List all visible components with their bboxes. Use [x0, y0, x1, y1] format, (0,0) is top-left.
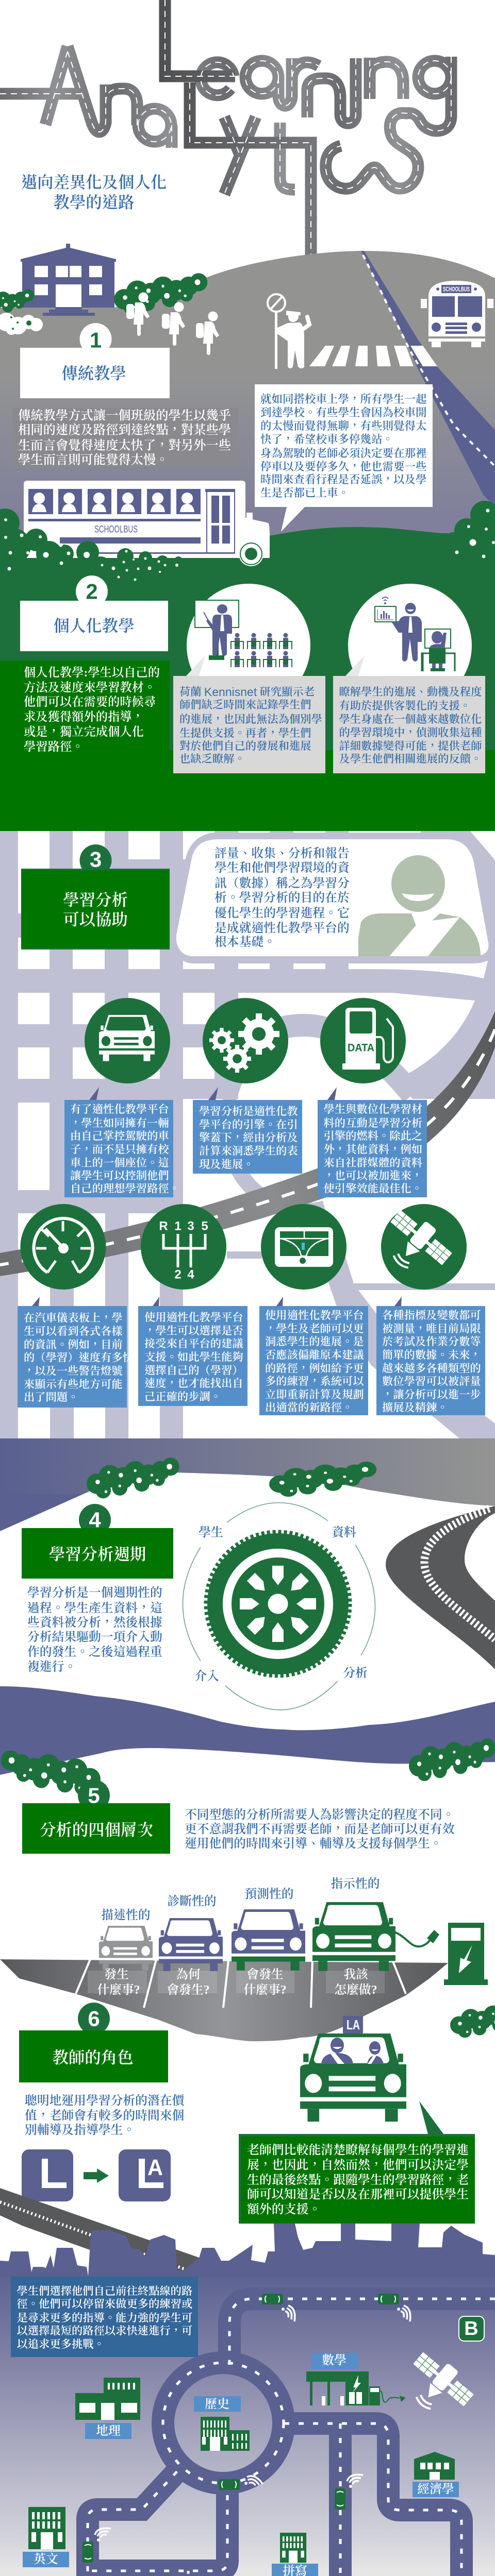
number badge 6	[78, 2003, 110, 2035]
text box: dashboard: 的資訊。例如，目前	[24, 1338, 123, 1351]
section 2 background: bright green	[0, 660, 495, 831]
text box: understanding students: 瞭解學生的進展、動機及程度	[339, 686, 482, 698]
text box: understanding students: 學生身處在一個越來越數位化	[338, 713, 482, 725]
subtitle	[21, 173, 167, 211]
text block: traditional teaching: 生而言會覺得速度太快了，對另外一些	[18, 439, 231, 452]
text block: cycle description	[27, 1586, 162, 1674]
level 3: predictive car: 什麼事?	[243, 1983, 287, 1997]
text block: personalised teaching: 或是，獨立完成個人化	[24, 725, 144, 739]
level 2: diagnostic car: 診斷性的	[167, 1894, 217, 1908]
heading: learning analytics cycle	[22, 1528, 173, 1579]
text box: navigation: 多的練習，系統可以	[265, 1375, 365, 1387]
icon: school bus side: SCHOOLBUS	[94, 524, 138, 535]
section 3 background: street grid	[0, 831, 495, 1438]
text block: levels of analytics: 更不意謂我們不再需要老師，而是老師可以更有效	[185, 1822, 455, 1836]
text box: adaptive platform car: 由自己掌控駕駛的車	[70, 1130, 169, 1142]
curved dark road	[386, 1506, 495, 1669]
heading: four levels of analytics: 分析的四個層次	[40, 1821, 153, 1839]
chart: tyre cycle diagram	[183, 1503, 375, 1710]
text block: traditional teaching: 傳統教學方式讓一個班級的學生以幾乎	[18, 409, 231, 422]
bush right of section 6	[450, 2003, 495, 2038]
number badge 4: 4	[89, 1507, 101, 1532]
heading: four levels of analytics	[22, 1803, 170, 1854]
text box: dashboard: 來顯示有些地方可能	[24, 1378, 123, 1391]
chart: tyre cycle diagram: 介入	[194, 1669, 219, 1683]
level 4: prescriptive car and charger	[312, 1877, 488, 1997]
text block: cycle description: 分析結果驅動一項介入動	[27, 1630, 162, 1644]
level 1: descriptive car: 描述性的	[101, 1908, 151, 1922]
callout: school bus analogy: 的太慢而覺得無聊，有些則覺得太	[260, 420, 427, 432]
text box: fuel: 學生與數位化學習材	[323, 1103, 422, 1115]
icon: learner car with LA sign	[300, 2016, 406, 2122]
windshield with definition and driver: 學生和他們學習環境的資	[214, 861, 351, 875]
text box: dashboard: ，以及一些警告燈號	[24, 1365, 123, 1377]
text box: Kennisnet research	[173, 676, 325, 773]
icon: school building	[21, 244, 116, 316]
bushes around the green hill	[0, 501, 495, 581]
text box: navigation	[259, 1306, 368, 1415]
illustration: teacher with tablet bubble	[345, 584, 472, 707]
building: history	[194, 2396, 250, 2451]
signs A and B: B	[464, 2318, 478, 2340]
bushes section 5	[1, 1738, 495, 1795]
text box: gears choice: ，學生可以選擇是否	[144, 1325, 243, 1337]
text box: indicators: 越來越多各種類型的	[382, 1362, 481, 1375]
text box: dashboard: 的（學習）速度有多快	[24, 1351, 134, 1364]
text box: gears choice: 接受來自平台的建議	[144, 1337, 243, 1350]
icon: car	[85, 998, 170, 1100]
section 6 map background	[0, 2276, 495, 2576]
icon: data fuel pump: DATA	[348, 1042, 374, 1054]
building: mathematics charging station	[306, 2353, 406, 2405]
bushes near school	[0, 273, 207, 335]
illustration: classroom teacher bubble	[186, 584, 310, 707]
text block: personalised teaching	[23, 666, 160, 754]
callout: school bus analogy: 到達學校。有些學生會因為校車開	[260, 406, 427, 419]
number badge 2	[76, 575, 108, 607]
text box: adaptive platform car: ，學生如同擁有一輛	[70, 1117, 169, 1129]
text box: navigation: ，學生及老師可以更	[265, 1323, 364, 1335]
building: economics	[412, 2452, 459, 2497]
chart: tyre cycle diagram: 分析	[343, 1666, 368, 1680]
chart: tyre cycle diagram: 資料	[332, 1526, 356, 1539]
level 4: prescriptive car and charger: 怎麼做?	[334, 1983, 377, 1997]
heading: traditional teaching: 傳統教學	[61, 365, 126, 382]
icon: gear shift: R	[159, 1219, 168, 1233]
icon: school bus front	[421, 281, 493, 347]
heading: learning analytics cycle: 學習分析週期	[48, 1546, 146, 1563]
icon: gear shift: 1	[174, 1219, 182, 1233]
building: geography	[75, 2378, 140, 2439]
section 4 background	[0, 1438, 495, 1783]
text box: students choose their path: 徑。他們可以停留來做更多的練習或	[16, 2298, 192, 2310]
callout: school bus analogy: 生是否都已上車。	[260, 487, 349, 499]
level 1: descriptive car: 發生	[104, 1968, 129, 1981]
text block: levels of analytics	[185, 1808, 455, 1851]
section 2 background: green hill	[0, 527, 495, 750]
callout: teachers understand progress	[239, 2101, 475, 2224]
diagonal road towards city	[0, 2188, 201, 2287]
text block: teacher role: 別輔導及指導學生。	[25, 2123, 135, 2137]
text box: gears choice: 己正確的步調。	[144, 1391, 221, 1403]
windshield with definition and driver: 評量、收集、分析和報告	[214, 846, 350, 860]
text box: dashboard: 生可以看到各式各樣	[24, 1325, 123, 1337]
bushes top of section 4	[87, 1458, 376, 1498]
text box: indicators: 被測量，唯目前局限	[382, 1323, 481, 1335]
heading: personalised teaching	[20, 601, 168, 651]
text box: gears choice: 使用適性化教學平台	[144, 1311, 243, 1324]
building: geography: 地理	[96, 2424, 121, 2438]
subtitle: 邁向差異化及個人化	[21, 173, 167, 192]
text block: teacher role: 聰明地運用學習分析的潛在價	[25, 2094, 186, 2108]
callout: teachers understand progress: 展，也因此，自然而然，他們可以決定學	[247, 2158, 469, 2172]
number badge 4	[79, 1504, 111, 1536]
text block: personalised teaching: 個人化教學:學生以自己的	[24, 666, 160, 680]
windshield with definition and driver: 優化學生的學習進程。它	[214, 906, 350, 920]
text box: dashboard: 出了問題。	[24, 1391, 78, 1403]
callout: teachers understand progress: 生的最後終點。跟隨學生的學習路徑，老	[247, 2173, 469, 2187]
heading: teacher role	[19, 2030, 168, 2082]
number badge 6: 6	[88, 2006, 100, 2031]
heading: learning analytics can help: 學習分析	[62, 891, 128, 909]
icon: L to LA signs with arrow	[22, 2149, 171, 2201]
text box: gears choice	[138, 1306, 248, 1406]
building: English: 英文	[34, 2552, 58, 2566]
number badge 1	[79, 323, 111, 355]
text box: Kennisnet research: 的進展，也因此無法為個別學	[179, 713, 322, 725]
windshield with definition and driver: 析。學習分析的目的在於	[214, 891, 350, 905]
windshield with definition and driver	[171, 833, 494, 963]
text box: gears choice: 速度，也才能找出自	[144, 1377, 243, 1389]
number badge 5: 5	[88, 1784, 100, 1807]
text box: understanding students: 詳細數據變得可能，提供老師	[339, 740, 482, 752]
icon: children walking	[126, 293, 219, 355]
text box: students choose their path: 是尋求更多的指導。能力強的學生可	[16, 2311, 192, 2324]
windshield with definition and driver: 是成就適性化教學平台的	[214, 921, 350, 935]
callout: teachers understand progress: 額外的支援。	[247, 2202, 321, 2216]
text block: traditional teaching: 學生而言則可能覺得太慢。	[18, 453, 169, 467]
text block: personalised teaching: 求及獲得額外的指導，	[24, 709, 144, 724]
icon: gears	[203, 998, 288, 1100]
icon: satellite	[373, 1204, 467, 1306]
text box: adaptive platform car	[64, 1100, 180, 1197]
text block: traditional teaching	[12, 408, 238, 467]
icon: crossing guard with sign	[268, 294, 309, 369]
text box: engine: 現及進展。	[199, 1158, 254, 1171]
text box: engine: 擎蓋下，經由分析及	[199, 1131, 298, 1144]
number badge 2: 2	[86, 579, 98, 604]
crosswalk	[309, 346, 437, 366]
heading: learning analytics can help	[21, 869, 170, 950]
icon: L to LA signs with arrow: A	[147, 2155, 163, 2180]
section 1 background: gray hill	[0, 251, 495, 572]
text box: students choose their path: 以選擇最短的路徑以求快速進行，可	[16, 2325, 192, 2337]
text box: adaptive platform car: 有了適性化教學平台	[70, 1103, 169, 1115]
text box: indicators: 各種指標及變數都可	[382, 1309, 481, 1321]
text box: Kennisnet research: 對於他們自己的發展和進展	[179, 740, 311, 752]
text block: personalised teaching: 他們可以在需要的時候尋	[24, 695, 156, 709]
text box: fuel	[318, 1100, 427, 1197]
icon: school bus front: SCHOOLBUS	[443, 285, 470, 293]
level 2: diagnostic car	[159, 1894, 223, 1997]
text box: indicators: ，讓分析可以進一步	[382, 1388, 481, 1401]
text block: personalised teaching: 學習路徑。	[23, 740, 84, 754]
icon: gear shift	[141, 1204, 226, 1306]
text block: personalised teaching: 方法及速度來學習教材。	[24, 681, 156, 694]
text box: fuel: 來自社群媒體的資料	[324, 1157, 422, 1169]
building: economics: 經濟學	[417, 2482, 454, 2496]
icon: gear shift: 3	[187, 1219, 194, 1233]
signs A and B	[45, 2316, 484, 2576]
building: history: 歷史	[205, 2397, 229, 2411]
number badge 3	[79, 844, 111, 876]
icon: map satellite	[397, 2346, 478, 2426]
text box: dashboard	[18, 1306, 134, 1408]
text box: understanding students: 及學生他們相關進展的反饋。	[339, 753, 482, 765]
icon: gear shift: 2	[174, 1267, 182, 1282]
icon: tablet with road	[261, 1204, 346, 1306]
text box: Kennisnet research: 生提供支援。再者，學生們	[179, 727, 311, 739]
icon: gear shift: 5	[201, 1219, 208, 1233]
section 5 background: white wave	[0, 1748, 495, 2040]
number badge 5	[78, 1780, 110, 1811]
text box: Kennisnet research: 也缺乏瞭解。	[179, 753, 245, 765]
callout: teachers understand progress: 師可以知道是否以及在那裡可以提供學生	[247, 2188, 469, 2201]
icon: learner car with LA sign: LA	[346, 2017, 360, 2032]
text box: understanding students: 的學習環境中，偵測收集這種	[339, 726, 482, 739]
text box: students choose their path: 以追求更多挑戰。	[16, 2338, 105, 2350]
callout: teachers understand progress: 老師們比較能清楚瞭解每個學生的學習進	[247, 2143, 469, 2157]
text box: navigation: 否應該偏離原本建議	[265, 1349, 364, 1361]
text box: indicators: 簡單的數據。未來，	[382, 1349, 481, 1361]
building: English	[23, 2507, 69, 2567]
text block: cycle description: 過程。學生產生資料，這	[27, 1601, 162, 1615]
callout: school bus analogy: 快了，希望校車多停幾站。	[260, 433, 393, 446]
level 1: descriptive car: 什麼事?	[97, 1983, 140, 1997]
level 3: predictive car	[232, 1887, 305, 1997]
level 4: prescriptive car and charger: 我該	[343, 1968, 369, 1981]
map roads	[88, 2299, 495, 2576]
level 2: diagnostic car: 會發生?	[167, 1983, 210, 1997]
subtitle: 教學的道路	[54, 194, 134, 211]
icon: gear shift: 4	[187, 1267, 194, 1282]
text block: teacher role	[25, 2094, 186, 2137]
heading: traditional teaching	[20, 348, 170, 398]
text box: engine: 學習分析是適性化教	[199, 1105, 298, 1117]
text box: fuel: ，也可以被加進來，	[324, 1170, 422, 1182]
title: Learning Analytics road lettering	[0, 0, 494, 255]
text block: cycle description: 複進行。	[27, 1660, 76, 1674]
building: mathematics charging station: 數學	[322, 2353, 346, 2367]
text box: engine: 學平台的引擎。在引	[199, 1118, 298, 1131]
text box: engine: 計算來洞悉學生的表	[199, 1145, 298, 1157]
callout: school bus analogy	[255, 384, 433, 532]
text block: traditional teaching: 相同的速度及路徑到達終點，對某些學	[18, 423, 231, 437]
text box: indicators	[376, 1306, 485, 1415]
number badge 3: 3	[90, 847, 102, 872]
text box: gears choice: 選擇自己的（學習）	[144, 1364, 243, 1377]
callout: school bus analogy: 停車以及要停多久，他也需要一些	[260, 461, 427, 473]
text box: navigation: 出適當的新路徑。	[265, 1401, 353, 1414]
windshield with definition and driver: 根本基礎。	[214, 935, 276, 949]
heading: personalised teaching: 個人化教學	[54, 617, 134, 635]
level 1: descriptive car	[97, 1908, 153, 1997]
text box: fuel: 外，其他資料，例如	[324, 1143, 422, 1156]
callout: school bus analogy: 時間來查看行程是否延誤，以及學	[260, 473, 427, 486]
text box: students choose their path: 學生們選擇他們自己前往終點線的路	[16, 2285, 192, 2297]
windshield with definition and driver: 訊（數據）稱之為學習分	[214, 876, 350, 890]
callout: school bus analogy: 就如同搭校車上學，所有學生一起	[260, 393, 427, 405]
level 2: diagnostic car: 為何	[176, 1968, 201, 1981]
text box: indicators: 數位學習可以被評量	[382, 1375, 481, 1387]
icon: blue road over the hill	[361, 251, 495, 507]
callout: school bus analogy: 身為駕駛的老師必須決定要在那裡	[260, 447, 427, 460]
text box: navigation: 洞悉學生的進展。是	[265, 1335, 364, 1348]
text box: dashboard: 在汽車儀表板上，學	[24, 1312, 123, 1324]
text box: gears choice: 支援。如此學生能夠	[144, 1351, 243, 1363]
text block: levels of analytics: 不同型態的分析所需要人為影響決定的程度不同。	[185, 1808, 455, 1822]
text box: adaptive platform car: 自己的理想學習路徑。	[70, 1182, 180, 1195]
building: spelling	[272, 2533, 318, 2576]
text box: indicators: 擴展及精鍊。	[382, 1401, 448, 1414]
text box: fuel: 料的互動是學習分析	[324, 1117, 422, 1129]
icon: school bus side	[24, 481, 270, 566]
text box: fuel: 使引擎效能最佳化。	[324, 1182, 422, 1195]
text box: engine	[193, 1100, 302, 1174]
text block: levels of analytics: 運用他們的時間來引導、輔導及支援每個學生。	[185, 1836, 442, 1851]
text box: indicators: 於考試及作業分數等	[382, 1335, 481, 1348]
text box: navigation: 的路徑，例如給予更	[265, 1362, 364, 1375]
heading: teacher role: 教師的角色	[53, 2048, 133, 2067]
highway	[0, 1011, 495, 1276]
text block: cycle description: 學習分析是一個週期性的	[27, 1586, 162, 1600]
number badge 1: 1	[90, 328, 102, 352]
text box: adaptive platform car: 讓學生可以控制他們	[70, 1170, 169, 1182]
city skyline	[0, 2224, 495, 2277]
text box: Kennisnet research: 師們缺乏時間來記錄學生們	[179, 699, 311, 711]
text box: adaptive platform car: 子，而不是只擁有校	[70, 1143, 170, 1156]
road under the four cars	[0, 1959, 448, 2041]
text box: fuel: 引擎的燃料。除此之	[324, 1130, 422, 1142]
text box: understanding students: 有助於提供客製化的支援。	[339, 700, 471, 712]
level 3: predictive car: 預測性的	[244, 1887, 294, 1901]
level 3: predictive car: 會發生	[246, 1968, 284, 1981]
text box: students choose their path	[11, 2277, 198, 2357]
text box: adaptive platform car: 車上的一個座位。這	[70, 1157, 169, 1169]
text box: navigation: 使用適性化教學平台	[265, 1309, 364, 1321]
map cars and wifi signals	[82, 2294, 410, 2576]
level 4: prescriptive car and charger: 指示性的	[331, 1877, 380, 1891]
text box: understanding students	[333, 676, 485, 773]
icon: speedometer	[21, 1204, 106, 1306]
text block: cycle description: 些資料被分析，然後根據	[27, 1616, 162, 1630]
icon: data fuel pump	[320, 998, 406, 1100]
chart: tyre cycle diagram: 學生	[198, 1526, 223, 1539]
text box: Kennisnet research: 荷蘭 Kennisnet 研究顯示老	[179, 685, 315, 699]
text box: navigation: 立即重新計算及規劃	[265, 1388, 364, 1401]
heading: learning analytics can help: 可以協助	[63, 911, 128, 928]
driver illustration	[358, 855, 481, 956]
text block: cycle description: 作的發生。之後這過程重	[27, 1645, 162, 1659]
text block: teacher role: 值，老師會有較多的時間來個	[25, 2109, 184, 2123]
